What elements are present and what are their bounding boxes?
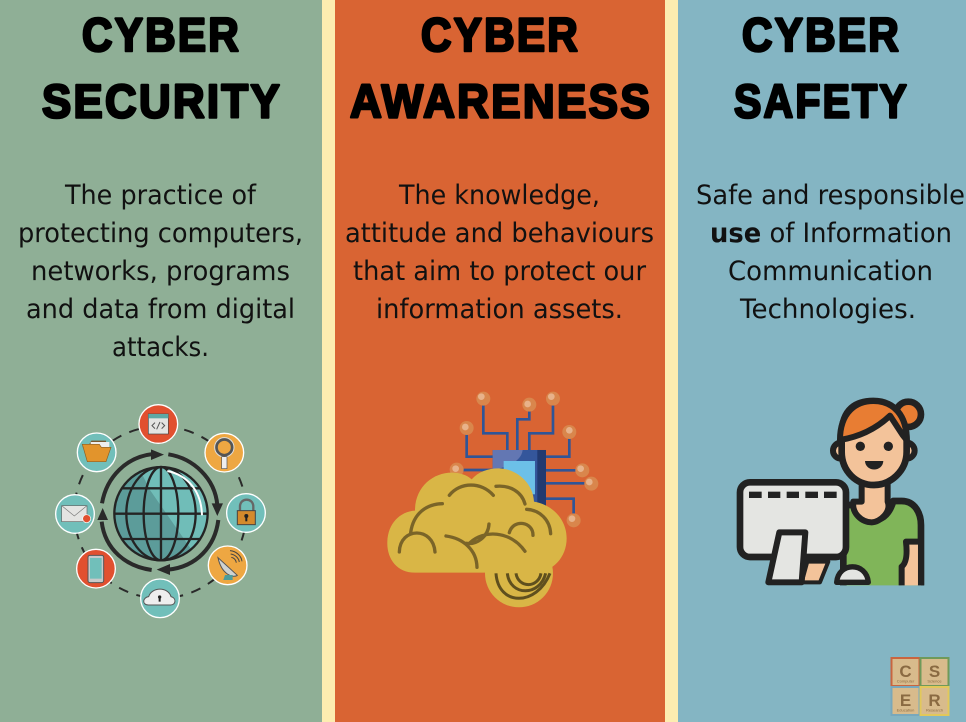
text: safety definition: Safe and responsible bbox=[696, 180, 965, 211]
hand bbox=[802, 562, 828, 582]
logo: CSER blocks: Science bbox=[927, 678, 942, 684]
text: security definition bbox=[18, 180, 303, 363]
logo: CSER blocks: Research bbox=[926, 708, 943, 712]
logo: CSER blocks bbox=[892, 658, 948, 715]
panel: cyber safety bbox=[678, 0, 966, 722]
panel: cyber awareness bbox=[335, 0, 665, 722]
text: awareness definition bbox=[345, 180, 654, 325]
text: safety definition: Communication bbox=[728, 256, 933, 287]
service bubbles bbox=[56, 405, 265, 618]
brain bbox=[387, 468, 567, 607]
icon: folder bbox=[82, 441, 111, 462]
text: awareness definition: that aim to protect our bbox=[353, 256, 646, 287]
panel: cyber security bbox=[0, 0, 322, 722]
monitor bbox=[740, 482, 846, 557]
mouse bbox=[837, 567, 868, 582]
icon: envelope with alert bbox=[62, 506, 91, 523]
monitor stand bbox=[768, 532, 805, 582]
icon: satellite dish bbox=[218, 551, 242, 580]
neck bbox=[853, 482, 888, 522]
logo: CSER blocks: S bbox=[929, 662, 940, 681]
hair bun bbox=[896, 402, 921, 427]
text: awareness definition: information assets. bbox=[376, 294, 623, 325]
icon: smartphone bbox=[88, 555, 104, 583]
icon: globe with connected services bbox=[56, 405, 265, 618]
head bbox=[842, 401, 907, 485]
logo: CSER blocks: C bbox=[899, 662, 912, 681]
text: awareness definition: attitude and behaviours bbox=[345, 218, 654, 249]
logo: CSER blocks: Computer bbox=[897, 678, 915, 684]
microchip bbox=[493, 450, 546, 507]
text: security definition: and data from digital bbox=[26, 294, 295, 325]
logo: CSER blocks: Education bbox=[897, 708, 914, 712]
heading: cyber security: CYBER bbox=[82, 8, 241, 61]
ears bbox=[833, 443, 915, 459]
text: security definition: protecting computers, bbox=[18, 218, 303, 249]
icon: padlock bbox=[237, 500, 255, 525]
shirt bbox=[843, 501, 921, 592]
text: safety definition: Technologies. bbox=[739, 294, 916, 325]
heading: cyber safety: SAFETY bbox=[734, 74, 909, 128]
icon: code window bbox=[148, 414, 168, 434]
circuit traces bbox=[456, 400, 590, 520]
logo: CSER blocks: R bbox=[928, 691, 941, 710]
monitor vents bbox=[749, 492, 837, 498]
face bbox=[856, 442, 893, 469]
logo: CSER blocks: E bbox=[900, 691, 911, 710]
heading: cyber awareness: AWARENESS bbox=[350, 74, 652, 128]
text: safety definition bbox=[696, 180, 965, 325]
globe bbox=[114, 467, 208, 560]
icon: cloud with lock bbox=[144, 589, 175, 605]
brain folds bbox=[399, 485, 551, 567]
circular arrows bbox=[97, 449, 223, 575]
heading: cyber safety: CYBER bbox=[742, 8, 901, 61]
text: security definition: networks, programs bbox=[31, 256, 290, 287]
circuit nodes bbox=[450, 392, 598, 527]
arm bbox=[902, 542, 921, 592]
heading: cyber security: SECURITY bbox=[42, 74, 282, 128]
text: safety definition: use of Information bbox=[710, 218, 952, 249]
icon: person at computer bbox=[740, 401, 921, 592]
heading: cyber security bbox=[42, 8, 282, 128]
text: security definition: The practice of bbox=[64, 180, 257, 211]
text: security definition: attacks. bbox=[112, 332, 209, 363]
icon: magnifier bbox=[215, 438, 234, 469]
hair bbox=[840, 401, 907, 440]
heading: cyber safety bbox=[734, 8, 909, 128]
heading: cyber awareness bbox=[350, 8, 652, 128]
text: awareness definition: The knowledge, bbox=[398, 180, 600, 211]
icon: brain cloud with microchip bbox=[387, 392, 598, 607]
heading: cyber awareness: CYBER bbox=[421, 8, 580, 61]
brain stem rings bbox=[496, 573, 550, 598]
